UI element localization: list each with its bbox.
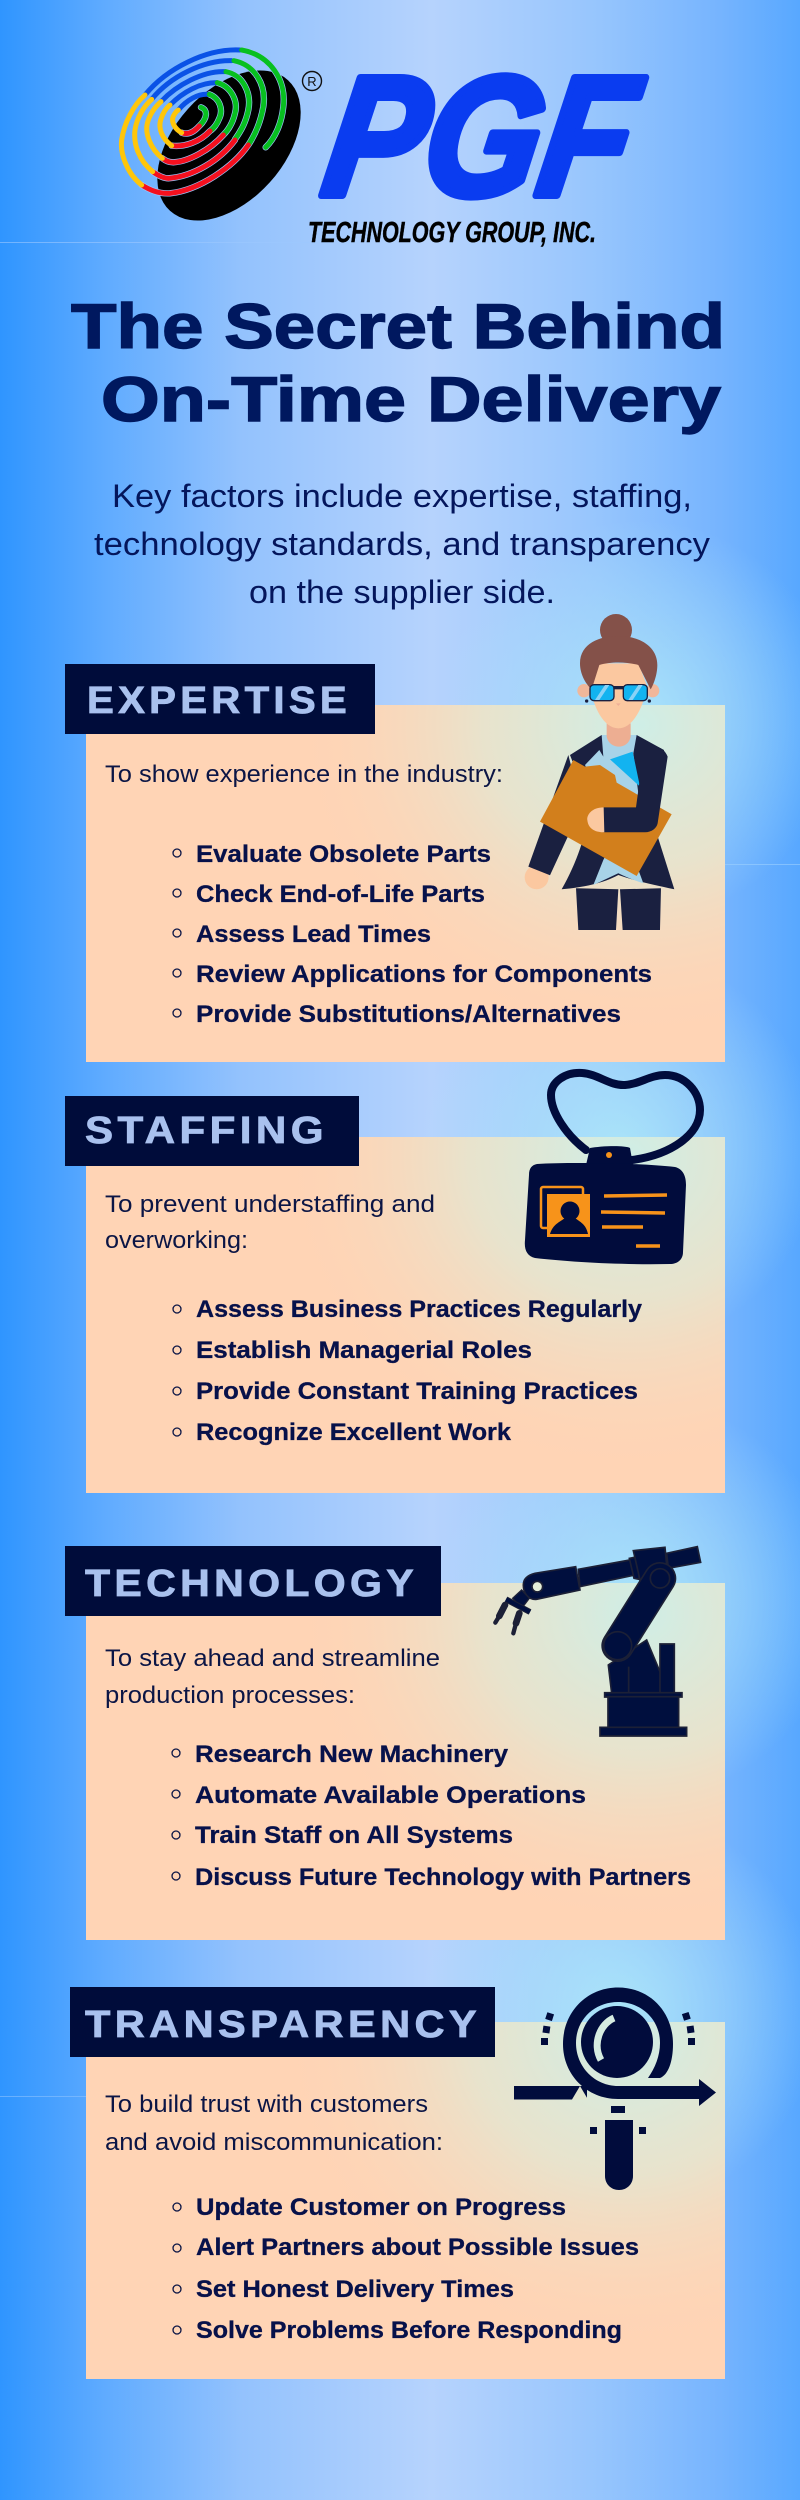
list: expertise: Check End-of-Life Parts	[196, 881, 485, 908]
panel background: expertise	[86, 705, 725, 1062]
heading: staffing	[65, 1096, 359, 1166]
list: technology: Discuss Future Technology with Partners	[195, 1864, 691, 1891]
list: staffing	[173, 1296, 643, 1446]
heading: expertise	[65, 664, 375, 734]
heading: expertise: EXPERTISE	[87, 680, 351, 722]
list: technology	[172, 1741, 691, 1891]
logo: PGF Technology Group	[121, 42, 652, 249]
icon: ID badge with lanyard	[525, 1073, 700, 1264]
list: transparency: Solve Problems Before Responding	[196, 2317, 622, 2344]
text: staffing intro: overworking:	[105, 1227, 248, 1254]
panel: transparency	[70, 1712, 800, 2379]
text: staffing intro: To prevent understaffing and	[105, 1191, 435, 1218]
intro text: Key factors include expertise, staffing,	[112, 478, 692, 514]
list: technology: Automate Available Operations	[195, 1782, 586, 1809]
panel: staffing	[65, 837, 800, 1493]
icon: registered mark: R	[307, 74, 317, 89]
title: On-Time Delivery	[101, 365, 721, 435]
intro text	[94, 478, 710, 610]
intro text: on the supplier side.	[249, 574, 555, 610]
panel: technology	[65, 1293, 800, 1940]
panel background: staffing	[86, 1137, 725, 1493]
text: staffing intro	[105, 1191, 435, 1254]
list: transparency: Update Customer on Progress	[196, 2194, 566, 2221]
list: staffing: Establish Managerial Roles	[196, 1337, 532, 1364]
heading: technology: TECHNOLOGY	[85, 1563, 418, 1605]
icon: robotic arm	[495, 1547, 701, 1736]
intro text: technology standards, and transparency	[94, 526, 710, 562]
list: transparency: Alert Partners about Possible Issues	[196, 2234, 639, 2261]
text: technology intro	[105, 1645, 440, 1709]
title	[71, 292, 725, 435]
list: expertise	[173, 841, 652, 1028]
icon: spiral disc	[121, 43, 329, 248]
heading: staffing: STAFFING	[85, 1110, 328, 1152]
list: expertise: Provide Substitutions/Alternatives	[196, 1001, 621, 1028]
text: transparency intro: To build trust with customers	[105, 2091, 428, 2118]
panel background: technology	[86, 1583, 725, 1940]
text: technology intro: To stay ahead and streamline	[105, 1645, 440, 1672]
icon: magnifier with arrow	[514, 1988, 716, 2190]
list: transparency: Set Honest Delivery Times	[196, 2276, 514, 2303]
logo tagline: TECHNOLOGY GROUP, INC.	[308, 217, 596, 249]
list: staffing: Recognize Excellent Work	[196, 1419, 512, 1446]
text: expertise intro: To show experience in the industry:	[105, 761, 503, 788]
list: expertise: Evaluate Obsolete Parts	[196, 841, 491, 868]
list: staffing: Assess Business Practices Regularly	[196, 1296, 643, 1323]
icon: woman holding folder	[525, 614, 674, 930]
text: transparency intro: and avoid miscommunication:	[105, 2129, 443, 2156]
list: staffing: Provide Constant Training Practices	[196, 1378, 638, 1405]
list: technology: Research New Machinery	[195, 1741, 509, 1768]
logo wordmark: PGF	[313, 42, 652, 232]
heading: transparency	[70, 1987, 495, 2057]
title: The Secret Behind	[71, 292, 725, 362]
heading: technology	[65, 1546, 441, 1616]
icon: registered mark	[302, 72, 322, 90]
text: transparency intro	[105, 2091, 443, 2156]
text: technology intro: production processes:	[105, 1682, 355, 1709]
list: expertise: Assess Lead Times	[196, 921, 431, 948]
heading: transparency: TRANSPARENCY	[85, 2004, 481, 2046]
list: expertise: Review Applications for Components	[196, 961, 652, 988]
panel: expertise	[65, 405, 800, 1062]
list: transparency	[173, 2194, 639, 2344]
list: technology: Train Staff on All Systems	[195, 1822, 513, 1849]
panel background: transparency	[86, 2022, 725, 2379]
